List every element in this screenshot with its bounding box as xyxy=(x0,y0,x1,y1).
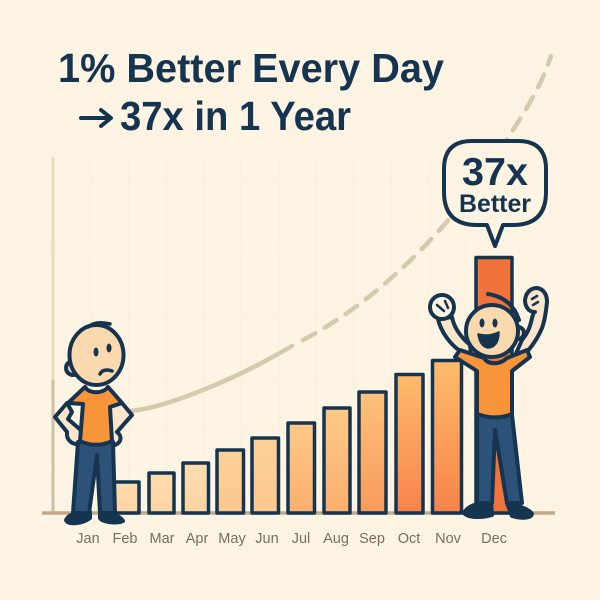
mouth xyxy=(100,370,112,374)
month labels: Oct xyxy=(398,531,420,547)
shoes xyxy=(464,502,492,517)
left fist fingers xyxy=(437,301,448,311)
left arm raised xyxy=(438,317,472,362)
head xyxy=(70,325,124,385)
growth curve xyxy=(130,56,551,411)
bar: Jun xyxy=(252,438,278,513)
bar: Sep xyxy=(359,392,386,513)
trousers xyxy=(73,442,115,513)
ear xyxy=(512,327,524,339)
open mouth xyxy=(478,332,499,348)
month labels: Jul xyxy=(292,531,310,547)
eyes xyxy=(94,348,98,356)
left arm xyxy=(55,403,84,444)
month labels: Feb xyxy=(112,531,138,547)
shirt xyxy=(455,350,530,417)
title xyxy=(58,45,444,139)
month labels xyxy=(76,531,507,547)
bar: Aug xyxy=(324,408,350,513)
trousers xyxy=(477,415,522,503)
right arm raised xyxy=(514,288,547,358)
month labels: Jan xyxy=(76,531,100,547)
left fist xyxy=(430,295,454,319)
bar: Mar xyxy=(149,473,174,513)
shirt xyxy=(68,387,122,445)
bar chart xyxy=(112,258,512,513)
right fist fingers xyxy=(532,296,538,305)
shoes xyxy=(66,512,90,523)
bar: May xyxy=(217,450,244,513)
eyes xyxy=(480,318,484,328)
bar: Nov xyxy=(432,360,462,513)
bar: Oct xyxy=(396,374,423,513)
month labels: Nov xyxy=(435,531,462,547)
bar: Apr xyxy=(183,463,208,513)
character: disappointed person xyxy=(55,323,132,523)
bar: Dec xyxy=(476,258,512,513)
head xyxy=(466,305,518,357)
speech bubble xyxy=(444,141,546,246)
character: happy person xyxy=(430,288,547,518)
month labels: Mar xyxy=(150,531,175,547)
ear xyxy=(66,361,80,375)
bar: Jul xyxy=(288,423,314,513)
month labels: Apr xyxy=(186,531,208,547)
month labels: Jun xyxy=(255,531,279,547)
bar: Feb xyxy=(112,482,139,513)
title: 37x in 1 Year xyxy=(120,93,351,139)
month labels: Aug xyxy=(323,531,349,547)
speech bubble: Better xyxy=(459,190,531,218)
arrow xyxy=(81,110,111,126)
right arm xyxy=(108,403,132,445)
x axis xyxy=(42,511,555,515)
y axis xyxy=(52,157,54,513)
month labels: Sep xyxy=(359,531,385,547)
hair xyxy=(488,294,519,320)
speech bubble: 37x xyxy=(462,151,528,194)
month labels: Dec xyxy=(481,531,507,547)
grid lines xyxy=(55,160,470,513)
month labels: May xyxy=(218,531,246,547)
hair xyxy=(88,323,110,327)
title: 1% Better Every Day xyxy=(58,45,444,91)
